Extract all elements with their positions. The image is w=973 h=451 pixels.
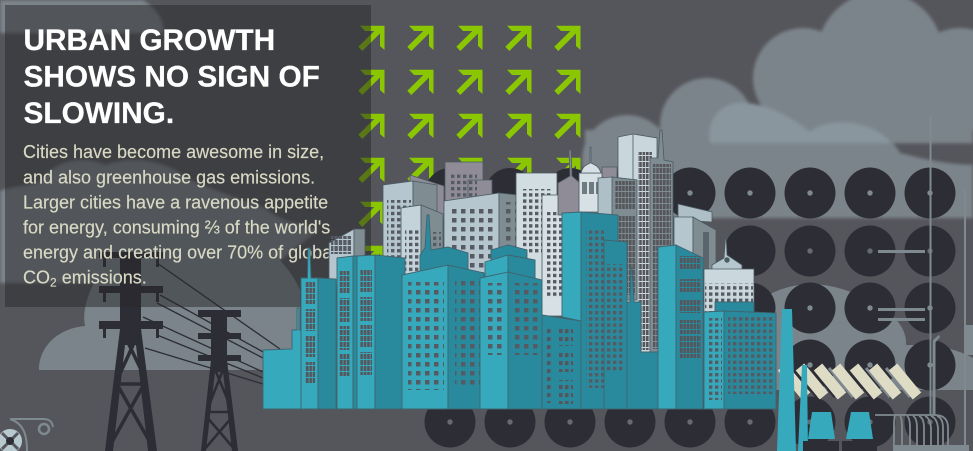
title: URBAN GROWTH [24, 24, 275, 57]
condenser pipes [875, 415, 948, 446]
body text: emissions. [57, 268, 147, 288]
tower 3 [402, 215, 484, 409]
power lines [143, 263, 280, 384]
tower 5 [542, 315, 581, 409]
arrow grid [358, 26, 580, 271]
wheel grid [424, 168, 956, 448]
low block [263, 308, 301, 409]
body text: Cities have become awesome in size, [23, 142, 324, 162]
clouds: upper right [582, 0, 973, 218]
body text: Larger cities have a ravenous appetite [23, 192, 328, 212]
purple blocks [410, 162, 492, 220]
body text: CO [23, 268, 50, 288]
tall central towers [598, 130, 673, 352]
tower 2 [337, 255, 405, 409]
domed white block [704, 232, 754, 320]
domed building [558, 147, 617, 215]
title [24, 24, 320, 130]
small grey block [329, 229, 365, 285]
gear icon [0, 419, 53, 451]
dark smoke [893, 143, 973, 165]
title: SLOWING. [24, 97, 174, 130]
tower 9 [704, 302, 776, 409]
tower 4 [480, 245, 542, 409]
tower 7 [627, 268, 658, 409]
back skyline [329, 130, 754, 352]
title: SHOWS NO SIGN OF [24, 60, 320, 94]
text panel [5, 5, 371, 307]
clouds: left side [0, 0, 318, 370]
insulator stripes [782, 367, 917, 397]
thin pipes and masts [878, 115, 973, 451]
body text: 2 [50, 276, 57, 290]
wide grey tower [444, 193, 528, 275]
grey tower [383, 181, 443, 300]
front skyline [263, 212, 776, 409]
clouds: lower right [760, 284, 973, 390]
cooling towers [803, 412, 877, 451]
pylon: small [198, 310, 241, 451]
right grey block [674, 204, 716, 270]
body text: and also greenhouse gas emissions. [23, 168, 315, 188]
tower 8 [658, 245, 703, 409]
body text [23, 142, 336, 290]
pylon: large [99, 252, 163, 451]
tower 1 [301, 248, 336, 409]
tower 6 [562, 212, 627, 409]
smoke stacks [777, 309, 808, 451]
body text: energy and creating over 70% of global [23, 242, 336, 262]
body text: for energy, consuming ⅔ of the world's [23, 218, 330, 238]
white towers [516, 173, 568, 316]
cloud highlight [709, 103, 890, 143]
